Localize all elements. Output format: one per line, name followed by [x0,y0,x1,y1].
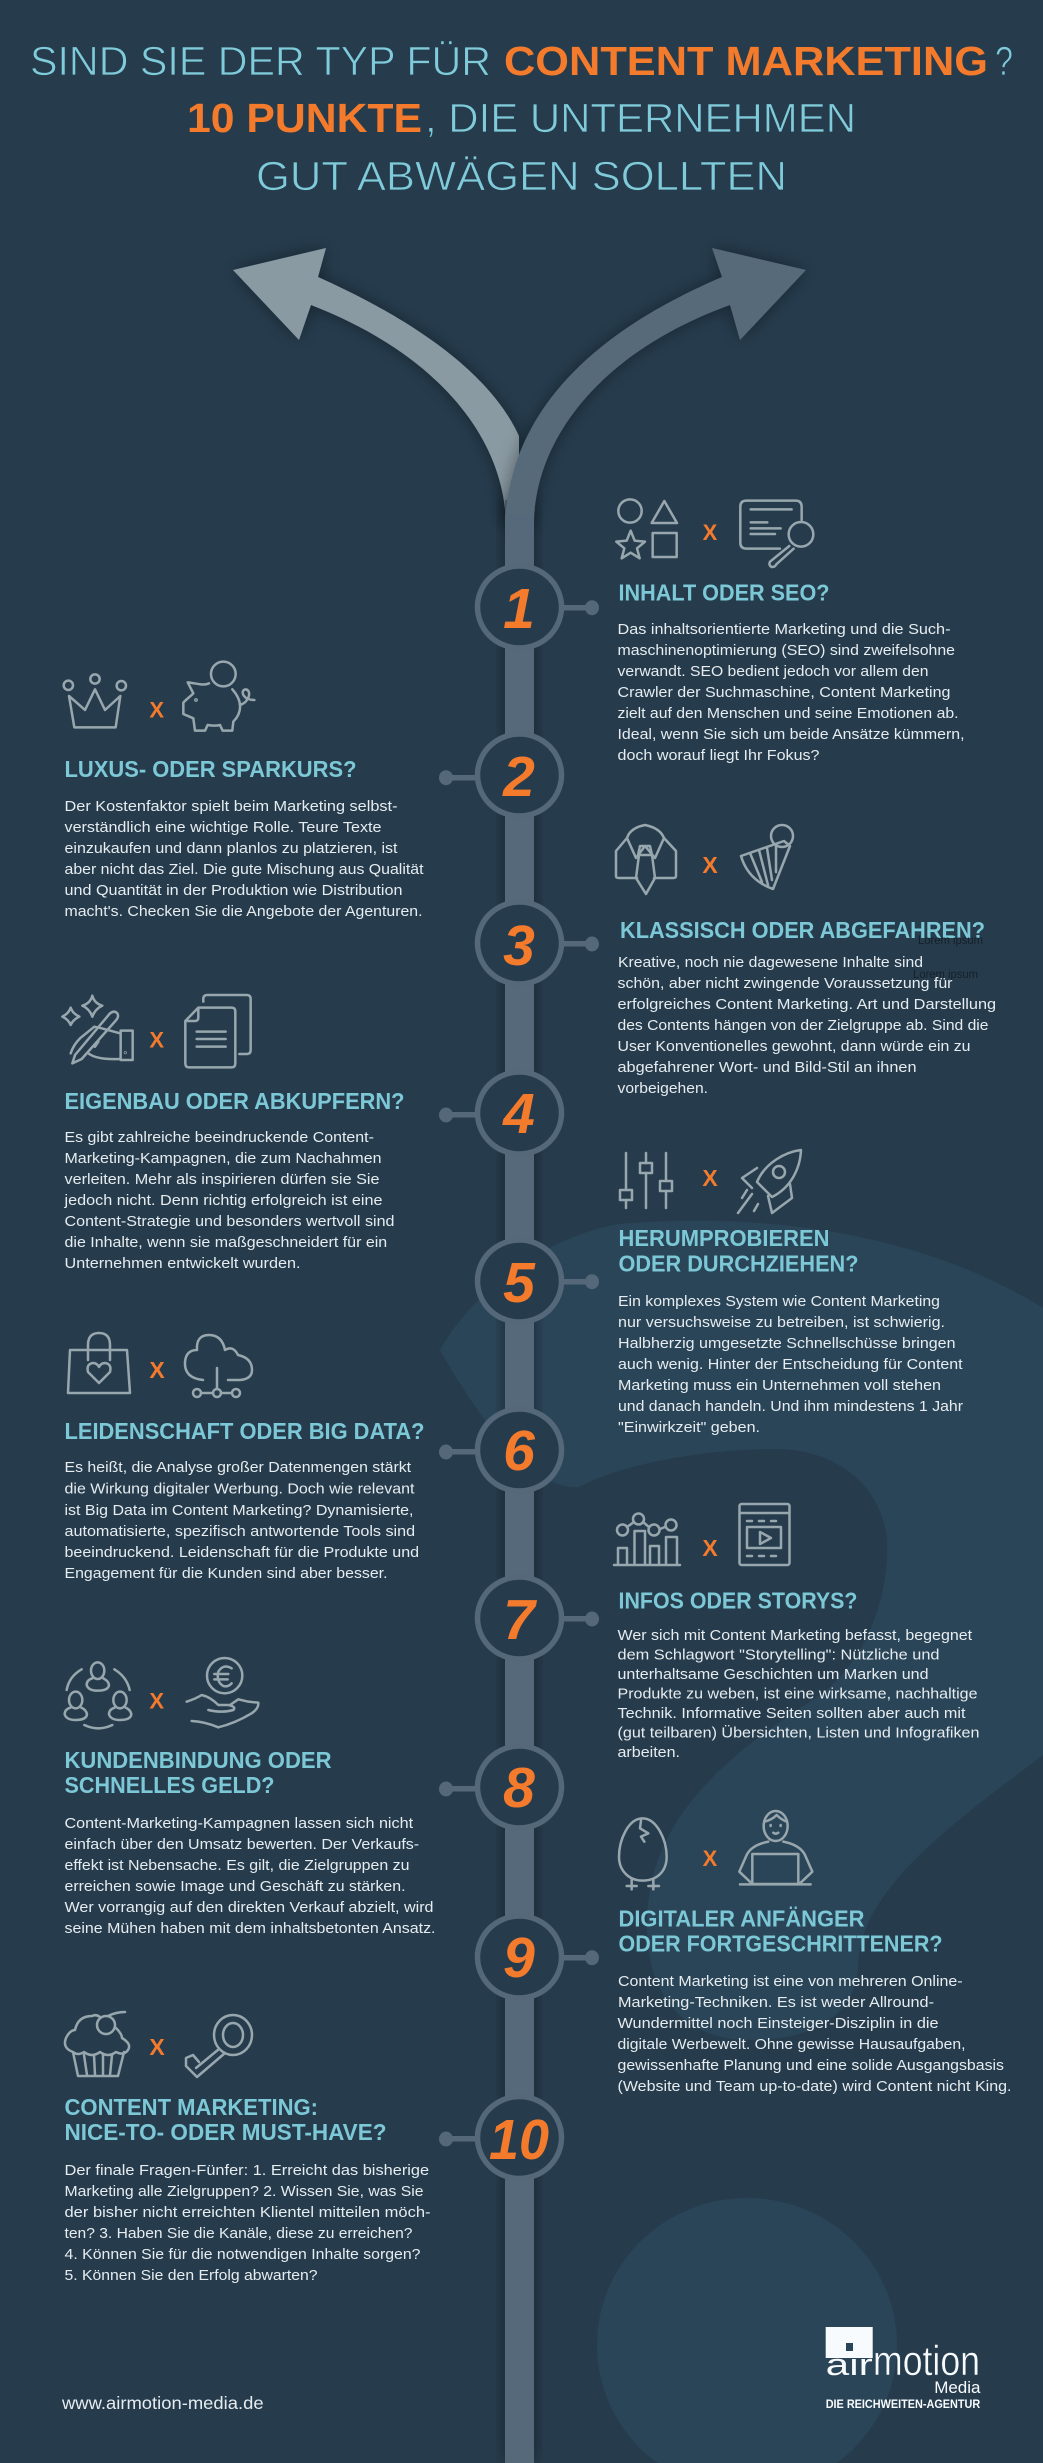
text block: erfolgreiches Content Marketing. Art und Darstellung [618,996,996,1013]
text block [64,1459,419,1582]
heading: NICE-TO- ODER MUST-HAVE? [64,2119,386,2145]
text block: des Contents hängen von der Zielgruppe ab. Sind die [618,1017,988,1034]
text block: 5. Können Sie den Erfolg abwarten? [64,2267,318,2284]
heading [64,1747,332,1798]
icon: shapes versus search document: X [703,520,718,545]
marker 10 [439,2096,562,2178]
text block: Marketing-Kampagnen, die zum Nachahmen [64,1150,381,1167]
text block: Halbherzig umgesetzte Schnellschüsse bringen [618,1335,956,1352]
text block: Engagement für die Kunden sind aber besser. [64,1565,387,1582]
website url: www.airmotion-media.de [61,2393,264,2413]
logo: airmotion Media: DIE REICHWEITEN-AGENTUR [826,2399,981,2411]
marker 5 [478,1240,599,1322]
heading: KLASSISCH ODER ABGEFAHREN? [620,917,985,943]
icon: hatching egg versus person at laptop: X [703,1846,718,1871]
title: 10 PUNKTE [187,95,422,141]
stray placeholder text: Lorem ipsum [913,969,978,981]
text block: abgefahrener Wort- und Bild-Stil an ihnen [618,1059,916,1076]
heading: CONTENT MARKETING: [64,2094,318,2120]
heading [64,2094,386,2145]
logo: airmotion Media: Media [934,2378,981,2397]
text block [618,1293,963,1436]
text block: (gut teilbaren) Übersichten, Listen und Infografiken [618,1724,980,1742]
panel: 4 Eigenbau oder Abkupfern [62,995,404,1272]
text block: aber nicht das Ziel. Die gute Mischung aus Qualität [64,861,424,878]
icon: customer circle versus hand with euro coin [65,1658,258,1728]
arrow: left branch [233,248,519,525]
text block: einfach über den Umsatz bewerten. Der Verkaufs- [64,1836,419,1853]
logo: airmotion Media: air [826,2347,873,2382]
heading: SCHNELLES GELD? [64,1772,274,1798]
panel: 1 Inhalt oder SEO [616,499,964,764]
title: CONTENT MARKETING [504,38,988,84]
title: , DIE UNTERNEHMEN [425,95,856,141]
stray placeholder text: Lorem ipsum [918,935,983,947]
panel: 10 Nice-to- oder Must-have [64,2012,430,2284]
marker 3 [478,902,599,984]
text block: vorbeigehen. [618,1080,708,1097]
text block: 4. Können Sie für die notwendigen Inhalte sorgen? [64,2246,420,2263]
marker 5: 5 [503,1251,536,1315]
title: GUT ABWÄGEN SOLLTEN [256,153,787,199]
marker 2 [439,734,562,816]
text block: beeindruckend. Leidenschaft für die Produkte und [64,1544,419,1561]
background question mark [440,1221,1043,2463]
icon: sliders versus rocket [620,1150,801,1213]
heading: LUXUS- ODER SPARKURS? [64,756,356,782]
icon: shirt and tie versus party hat: X [702,852,718,878]
text block: "Einwirkzeit" geben. [618,1419,760,1436]
marker 8 [439,1746,562,1828]
text block: verständlich eine wichtige Rolle. Teure Texte [64,819,382,836]
panel: 7 Infos oder Storys [614,1504,980,1761]
marker 3: 3 [503,914,535,978]
text block: Unternehmen entwickelt wurden. [64,1255,300,1272]
text block: zielt auf den Menschen und seine Emotionen ab. [618,705,958,722]
text block: unterhaltsame Geschichten um Marken und [618,1666,928,1683]
marker 7 [478,1577,599,1659]
stem overlap [505,515,534,2463]
text block: digitale Werbewelt. Ohne gewisse Hausaufgaben, [618,2036,966,2053]
text block: doch worauf liegt Ihr Fokus? [618,747,820,764]
stray placeholder text [913,935,983,981]
text block: Ideal, wenn Sie sich um beide Ansätze kümmern, [618,726,964,743]
icon: shirt and tie versus party hat [616,825,793,894]
text block: Technik. Informative Seiten sollten aber auch mit [618,1705,966,1722]
marker 4: 4 [502,1082,535,1146]
panel: 5 Herumprobieren oder durchziehen [618,1150,963,1436]
icon: crown versus piggy bank: X [149,697,164,722]
icon: customer circle versus hand with euro coin: X [149,1688,164,1713]
text block: dem Schlagwort "Storytelling": Nützliche und [618,1646,940,1664]
heading: KUNDENBINDUNG ODER [64,1747,332,1773]
logo: airmotion Media: motion [873,2337,980,2384]
marker 9 [478,1916,599,1998]
icon: shopping bag with heart versus cloud network [68,1333,252,1397]
marker 2: 2 [502,745,535,809]
icon: sliders versus rocket: X [702,1165,718,1191]
heading: INHALT ODER SEO? [618,580,830,606]
icon: cupcake versus key [65,2012,252,2077]
text block: gewissenhafte Planung und eine solide Ausgangsbasis [618,2057,1004,2074]
text block: verleiten. Mehr als inspirieren dürfen sie Sie [64,1171,380,1188]
heading: ODER DURCHZIEHEN? [618,1250,858,1276]
text block: Content-Marketing-Kampagnen lassen sich nicht [64,1815,414,1832]
text block: Produkte zu weben, ist eine wirksame, nachhaltige [618,1686,978,1702]
text block [63,1129,394,1272]
text block: User Konventionelles gewohnt, dann würde ein zu [618,1038,970,1055]
panel: 2 Luxus- oder Sparkurs [64,662,424,920]
logo: airmotion Media [826,2327,981,2411]
heading: LEIDENSCHAFT ODER BIG DATA? [64,1418,424,1444]
panel: 8 Kundenbindung oder schnelles Geld [64,1658,435,1937]
icon: shopping bag with heart versus cloud network: X [149,1357,165,1383]
text block: Der Kostenfaktor spielt beim Marketing selbst- [64,798,398,815]
heading: INFOS ODER STORYS? [618,1588,858,1614]
text block: Content Marketing ist eine von mehreren Online- [618,1973,963,1990]
text block: Marketing muss ein Unternehmen voll stehen [618,1377,941,1394]
heading: EIGENBAU ODER ABKUPFERN? [64,1088,404,1114]
panel: 6 Leidenschaft oder Big Data [64,1333,424,1582]
heading: DIGITALER ANFÄNGER [618,1906,865,1932]
text block [618,1973,1012,2095]
title [30,38,1013,199]
text block: maschinenoptimierung (SEO) sind zweifelsohne [618,642,955,659]
marker 6: 6 [503,1419,535,1483]
text block: Wer sich mit Content Marketing befasst, begegnet [618,1627,973,1644]
icon: writing hand versus documents: X [149,1028,164,1053]
text block: erreichen sowie Image und Geschäft zu stärken. [64,1878,406,1895]
text block: verwandt. SEO bedient jedoch vor allem den [618,663,928,680]
icon: shapes versus search document [616,499,813,567]
icon: hatching egg versus person at laptop [619,1811,812,1889]
text block: schön, aber nicht zwingende Voraussetzung für [618,975,952,992]
text block: die Inhalte, wenn sie maßgeschneidert für ein [64,1234,387,1251]
marker 9: 9 [503,1926,535,1990]
marker 10: 10 [489,2108,549,2172]
text block: Wundermittel noch Einsteiger-Disziplin in die [618,2015,938,2032]
marker 7: 7 [503,1588,537,1652]
text block: Das inhaltsorientierte Marketing und die Such- [618,621,950,638]
marker 8: 8 [503,1756,535,1820]
marker 1: 1 [503,577,535,641]
heading [618,1225,858,1276]
text block [618,1627,980,1761]
text block: Crawler der Suchmaschine, Content Marketing [618,684,950,701]
text block [64,1815,435,1937]
point markers [439,566,599,2178]
panel: 9 Digitaler Anfänger oder Fortgeschrittener [618,1811,1012,2095]
marker 4 [439,1072,562,1154]
heading [618,1906,942,1956]
text block: Es heißt, die Analyse großer Datenmengen stärkt [64,1459,412,1476]
text block: und Quantität in der Produktion wie Distribution [64,882,402,899]
title: SIND SIE DER TYP FÜR [30,38,491,84]
text block: Content-Strategie und besonders wertvoll sind [64,1213,394,1230]
text block: einzukaufen und dann planlos zu platzieren, ist [64,840,398,857]
text block: Wer vorrangig auf den direkten Verkauf abzielt, wird [64,1899,434,1916]
marker 1 [478,566,599,648]
text block [618,621,964,764]
text block: nur versuchsweise zu betreiben, ist schwierig. [618,1314,945,1331]
text block [64,2162,430,2284]
text block [64,798,424,920]
text block: Es gibt zahlreiche beeindruckende Content- [64,1129,374,1146]
text block: jedoch nicht. Denn richtig erfolgreich ist eine [63,1192,382,1209]
text block: und danach handeln. Und ihm mindestens 1 Jahr [618,1398,963,1415]
text block: Kreative, noch nie dagewesene Inhalte sind [618,954,923,971]
text block: automatisierte, spezifisch antwortende Tools sind [64,1523,415,1540]
panel: 3 Klassisch oder abgefahren [616,825,996,1097]
marker 6 [439,1409,562,1491]
text block: (Website und Team up-to-date) wird Content nicht King. [618,2078,1012,2095]
icon: crown versus piggy bank [64,662,254,731]
text block: ten? 3. Haben Sie die Kanäle, diese zu erreichen? [64,2225,412,2242]
icon: bar chart versus video tablet: X [702,1535,718,1561]
icon: cupcake versus key: X [149,2034,165,2060]
text block: arbeiten. [618,1744,680,1761]
arrow: right branch [505,248,806,525]
text block: macht's. Checken Sie die Angebote der Agenturen. [64,903,422,920]
text block: der bisher nicht erreichten Klientel mitteilen möch- [64,2204,430,2221]
icon: writing hand versus documents [62,995,251,1067]
text block [618,954,996,1097]
heading: HERUMPROBIEREN [618,1225,830,1251]
text block: Marketing-Techniken. Es ist weder Allround- [618,1994,934,2011]
heading: ODER FORTGESCHRITTENER? [618,1930,942,1956]
text block: seine Mühen haben mit dem inhaltsbetonten Ansatz. [64,1920,435,1937]
text block: die Wirkung digitaler Werbung. Doch wie relevant [64,1480,415,1498]
text block: effekt ist Nebensache. Es gilt, die Zielgruppen zu [64,1857,410,1874]
text block: Der finale Fragen-Fünfer: 1. Erreicht das bisherige [64,2162,429,2179]
title: ? [995,38,1013,84]
text block: auch wenig. Hinter der Entscheidung für Content [618,1356,963,1373]
text block: ist Big Data im Content Marketing? Dynamisierte, [64,1502,414,1519]
timeline stem [505,500,534,2463]
icon: bar chart versus video tablet [614,1504,790,1565]
text block: Ein komplexes System wie Content Marketing [618,1293,940,1310]
text block: Marketing alle Zielgruppen? 2. Wissen Sie, was Sie [64,2183,423,2200]
